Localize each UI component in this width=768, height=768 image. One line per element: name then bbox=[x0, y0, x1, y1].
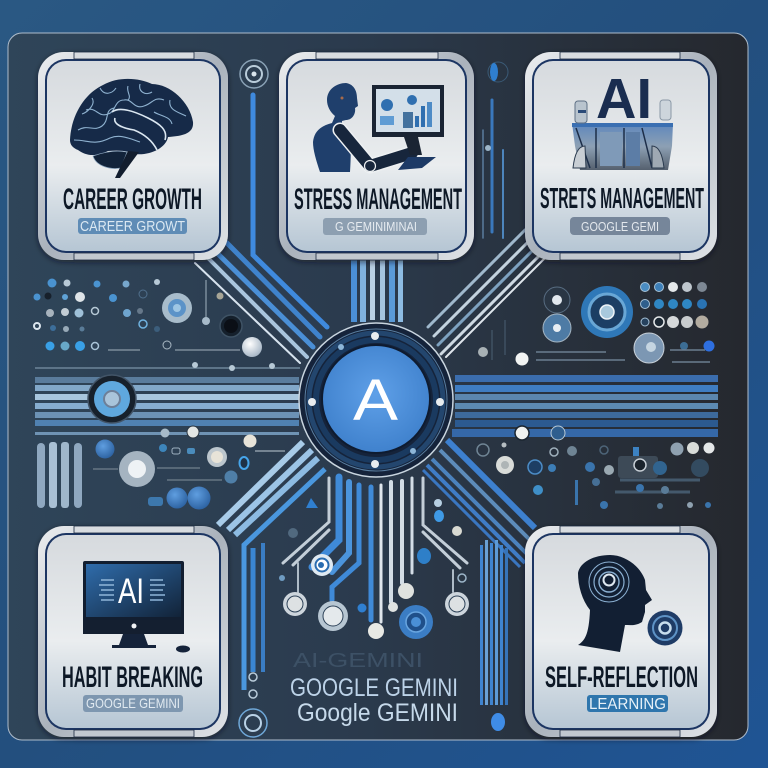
icon: monitor bbox=[83, 561, 190, 652]
left dots field bbox=[34, 278, 275, 371]
lower right small icons bbox=[477, 442, 714, 509]
card frame bbox=[38, 526, 228, 737]
circuit traces: upper left diagonal bbox=[195, 95, 327, 363]
right upper knobs bbox=[543, 287, 571, 342]
circuit traces: lower left diagonal bbox=[218, 442, 325, 690]
sublabel: CAREER GROWT bbox=[80, 218, 185, 235]
circuit traces: bottom fan bbox=[283, 477, 467, 622]
thin stem and dots bbox=[202, 280, 224, 325]
right circuit details bbox=[478, 320, 714, 440]
card: stress management: STRESS MANAGEMENT bbox=[294, 183, 462, 216]
heading: HABIT BREAKING bbox=[62, 661, 203, 694]
lower left balls and knobs bbox=[93, 434, 285, 510]
card: AI stress management bbox=[525, 52, 717, 260]
top right trace lines bbox=[483, 100, 503, 238]
top ring icon left bbox=[240, 60, 268, 88]
footer line one: GOOGLE GEMINI bbox=[290, 674, 458, 702]
card frame bbox=[38, 52, 228, 260]
icon: head silhouette bbox=[578, 555, 682, 652]
sublabel: GOOGLE GEMINI bbox=[86, 695, 180, 711]
sublabel: LEARNING bbox=[589, 696, 666, 713]
dark ball bbox=[220, 315, 242, 337]
hub studs bbox=[308, 332, 444, 468]
icon: monitor: AI bbox=[118, 572, 144, 611]
card frame bbox=[525, 52, 717, 260]
silver ball right bbox=[634, 333, 664, 363]
card: stress management bbox=[279, 52, 474, 260]
footer line two: Google GEMINI bbox=[297, 699, 458, 727]
sublabel: G GEMINIMINAI bbox=[335, 219, 417, 234]
bottom right vertical stripes bbox=[480, 540, 508, 705]
center hub bbox=[299, 323, 453, 477]
card frame bbox=[525, 526, 717, 737]
left horizontal stripes bbox=[35, 367, 300, 435]
hub outer ring bbox=[299, 323, 453, 477]
icon: brain bbox=[70, 79, 193, 178]
card: self-reflection bbox=[525, 526, 717, 737]
circuit traces: upper right diagonal bbox=[428, 230, 548, 357]
right horizontal stripes bbox=[452, 375, 718, 437]
card: habit breaking bbox=[38, 526, 228, 737]
footer brand text bbox=[290, 650, 458, 727]
hub blue core bbox=[322, 345, 430, 453]
left dial in stripes bbox=[88, 375, 136, 423]
hub circuit ring bbox=[305, 329, 447, 471]
bottom ring icon bbox=[239, 673, 267, 737]
silver knob upper left bbox=[162, 293, 192, 323]
faint ghost text: AI-GEMINI bbox=[293, 650, 423, 672]
sublabel: GOOGLE GEMI bbox=[581, 219, 659, 234]
heading: CAREER GROWTH bbox=[63, 183, 202, 216]
bottom fan knobs bbox=[279, 498, 505, 731]
knobs below left stripes bbox=[160, 426, 199, 438]
hub letter: A bbox=[353, 368, 398, 433]
pill bars bbox=[37, 442, 82, 508]
icon: person at computer bbox=[313, 83, 444, 172]
icon: meeting table bbox=[572, 100, 673, 170]
blue dial bbox=[581, 286, 633, 338]
AI letters: AI bbox=[596, 67, 652, 131]
card frame bbox=[279, 52, 474, 260]
card: career growth bbox=[38, 52, 228, 260]
icon dot grid bbox=[640, 282, 708, 328]
top ring icon right bbox=[485, 62, 508, 151]
circuit traces: lower right diagonal bbox=[423, 440, 535, 567]
white ball bbox=[242, 337, 262, 357]
circuit traces: top verticals bbox=[351, 260, 403, 322]
